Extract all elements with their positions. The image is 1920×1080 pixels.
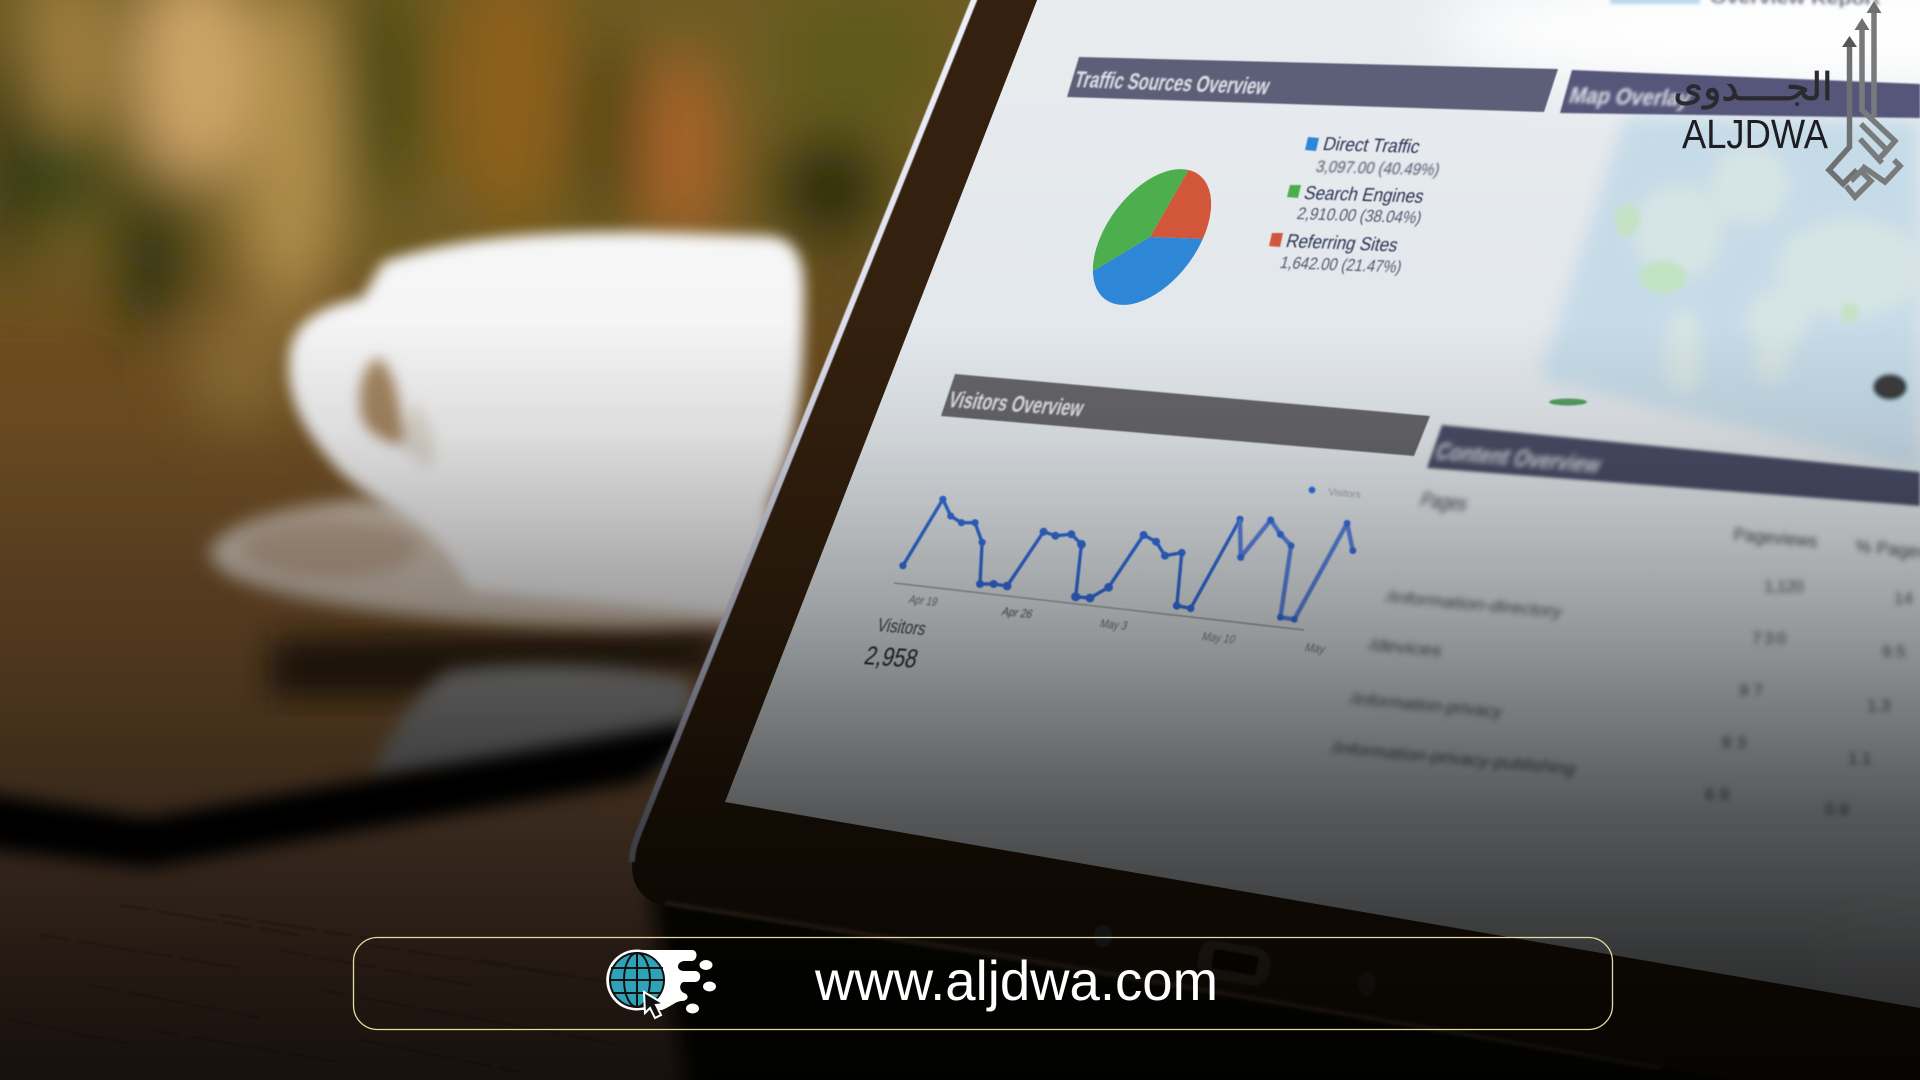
- logo: ALJDWA: [1673, 1, 1900, 197]
- table column titles: Pages: [1417, 489, 1470, 516]
- legend: search engines: [1287, 183, 1426, 227]
- traffic sources header bar: [1067, 57, 1558, 112]
- icon: speed trails: [636, 950, 700, 1010]
- website url: www.aljdwa.com: [814, 949, 1218, 1012]
- table rows: 1.3: [1867, 696, 1891, 715]
- content overview heading: Content Overview: [1432, 439, 1604, 479]
- footer: website pill: [354, 938, 1612, 1030]
- table rows: /information-privacy-publishing: [1329, 738, 1579, 778]
- table rows: 69: [1705, 785, 1729, 804]
- logo latin wordmark: ALJDWA: [1682, 111, 1829, 157]
- photo: smartphone on table: [0, 665, 692, 904]
- photo: dark shadow under saucer: [270, 625, 720, 695]
- logo arrowheads: [1842, 1, 1882, 47]
- pie chart: [1092, 169, 1212, 305]
- table rows: 730: [1752, 629, 1786, 648]
- panel: visitors overview: [861, 374, 1430, 673]
- panel: traffic sources overview: [1040, 57, 1558, 330]
- legend: referring sites: 1,642.00 (21.47%): [1278, 252, 1404, 277]
- chart date labels: May 3: [1098, 617, 1130, 633]
- tablet silver edge: [632, 0, 976, 862]
- legend: direct traffic: [1305, 134, 1442, 179]
- table rows: /information-privacy: [1348, 689, 1506, 721]
- icon: globe with cursor: [606, 950, 716, 1018]
- table rows: 1.1: [1848, 749, 1872, 768]
- panel: map overlay header: [1560, 70, 1920, 118]
- tablet lower edge highlight: [665, 903, 1660, 1068]
- chart date labels: [907, 593, 1328, 656]
- legend: direct traffic: 3,097.00 (40.49%): [1314, 156, 1442, 179]
- table rows: 0.9: [1825, 800, 1849, 819]
- photo: coffee saucer: [210, 500, 760, 628]
- table rows: 1,120: [1764, 577, 1804, 596]
- legend: search engines: Search Engines: [1302, 183, 1426, 208]
- table rows: 97: [1739, 681, 1763, 700]
- photo: tablet shadow on table: [650, 890, 1810, 1080]
- logo calligraphic arrow mark: [1829, 12, 1900, 197]
- traffic sources heading: Traffic Sources Overview: [1072, 67, 1273, 99]
- map overlay heading: Map Overlay: [1567, 82, 1694, 111]
- legend: search engines: 2,910.00 (38.04%): [1295, 203, 1424, 227]
- content overview header bar: [1427, 425, 1920, 506]
- chart date labels: May: [1303, 641, 1328, 656]
- legend: direct traffic: Direct Traffic: [1321, 134, 1423, 158]
- map region on screen: [1540, 117, 1920, 470]
- table rows: /devices: [1367, 635, 1444, 660]
- top cut-off screen text: [1610, 0, 1881, 8]
- line chart axis: [894, 583, 1304, 630]
- tablet screen: [725, 0, 1920, 1008]
- table rows: /information-directory: [1384, 587, 1565, 621]
- panel: tablet device: [632, 0, 1920, 1080]
- table rows: 83: [1722, 733, 1746, 752]
- table column titles: [1417, 489, 1920, 565]
- photo: cup handle opening: [360, 358, 434, 470]
- screen glare: [1192, 0, 1920, 87]
- chart date labels: Apr 19: [907, 593, 940, 609]
- chart legend marker: [1309, 487, 1361, 501]
- chart date labels: May 10: [1200, 630, 1238, 646]
- visitors heading: Visitors Overview: [945, 387, 1088, 421]
- pill outline: [354, 938, 1612, 1030]
- table rows: [1329, 577, 1913, 819]
- visitors metric label: Visitors: [875, 616, 929, 640]
- visitors header bar: [941, 374, 1430, 456]
- tablet body and bezel: [632, 0, 1920, 1080]
- icon: cursor: [644, 992, 664, 1018]
- line chart: visitors: [899, 496, 1356, 623]
- panel: content overview table: [1329, 425, 1920, 819]
- table rows: 14: [1894, 589, 1913, 608]
- table rows: 9.5: [1882, 642, 1906, 661]
- photo: white coffee cup: [289, 232, 804, 618]
- tablet home button: [1094, 925, 1376, 996]
- table column titles: Pageviews: [1733, 524, 1818, 551]
- visitors metric value: 2,958: [861, 641, 922, 673]
- logo arabic wordmark: الجــــدوى: [1673, 65, 1833, 110]
- chart date labels: Apr 26: [1000, 605, 1035, 621]
- legend: referring sites: Referring Sites: [1284, 231, 1400, 256]
- chart legend marker: Visitors: [1328, 487, 1361, 501]
- legend: referring sites: [1269, 231, 1404, 277]
- wood grain texture on table: [10, 905, 650, 1072]
